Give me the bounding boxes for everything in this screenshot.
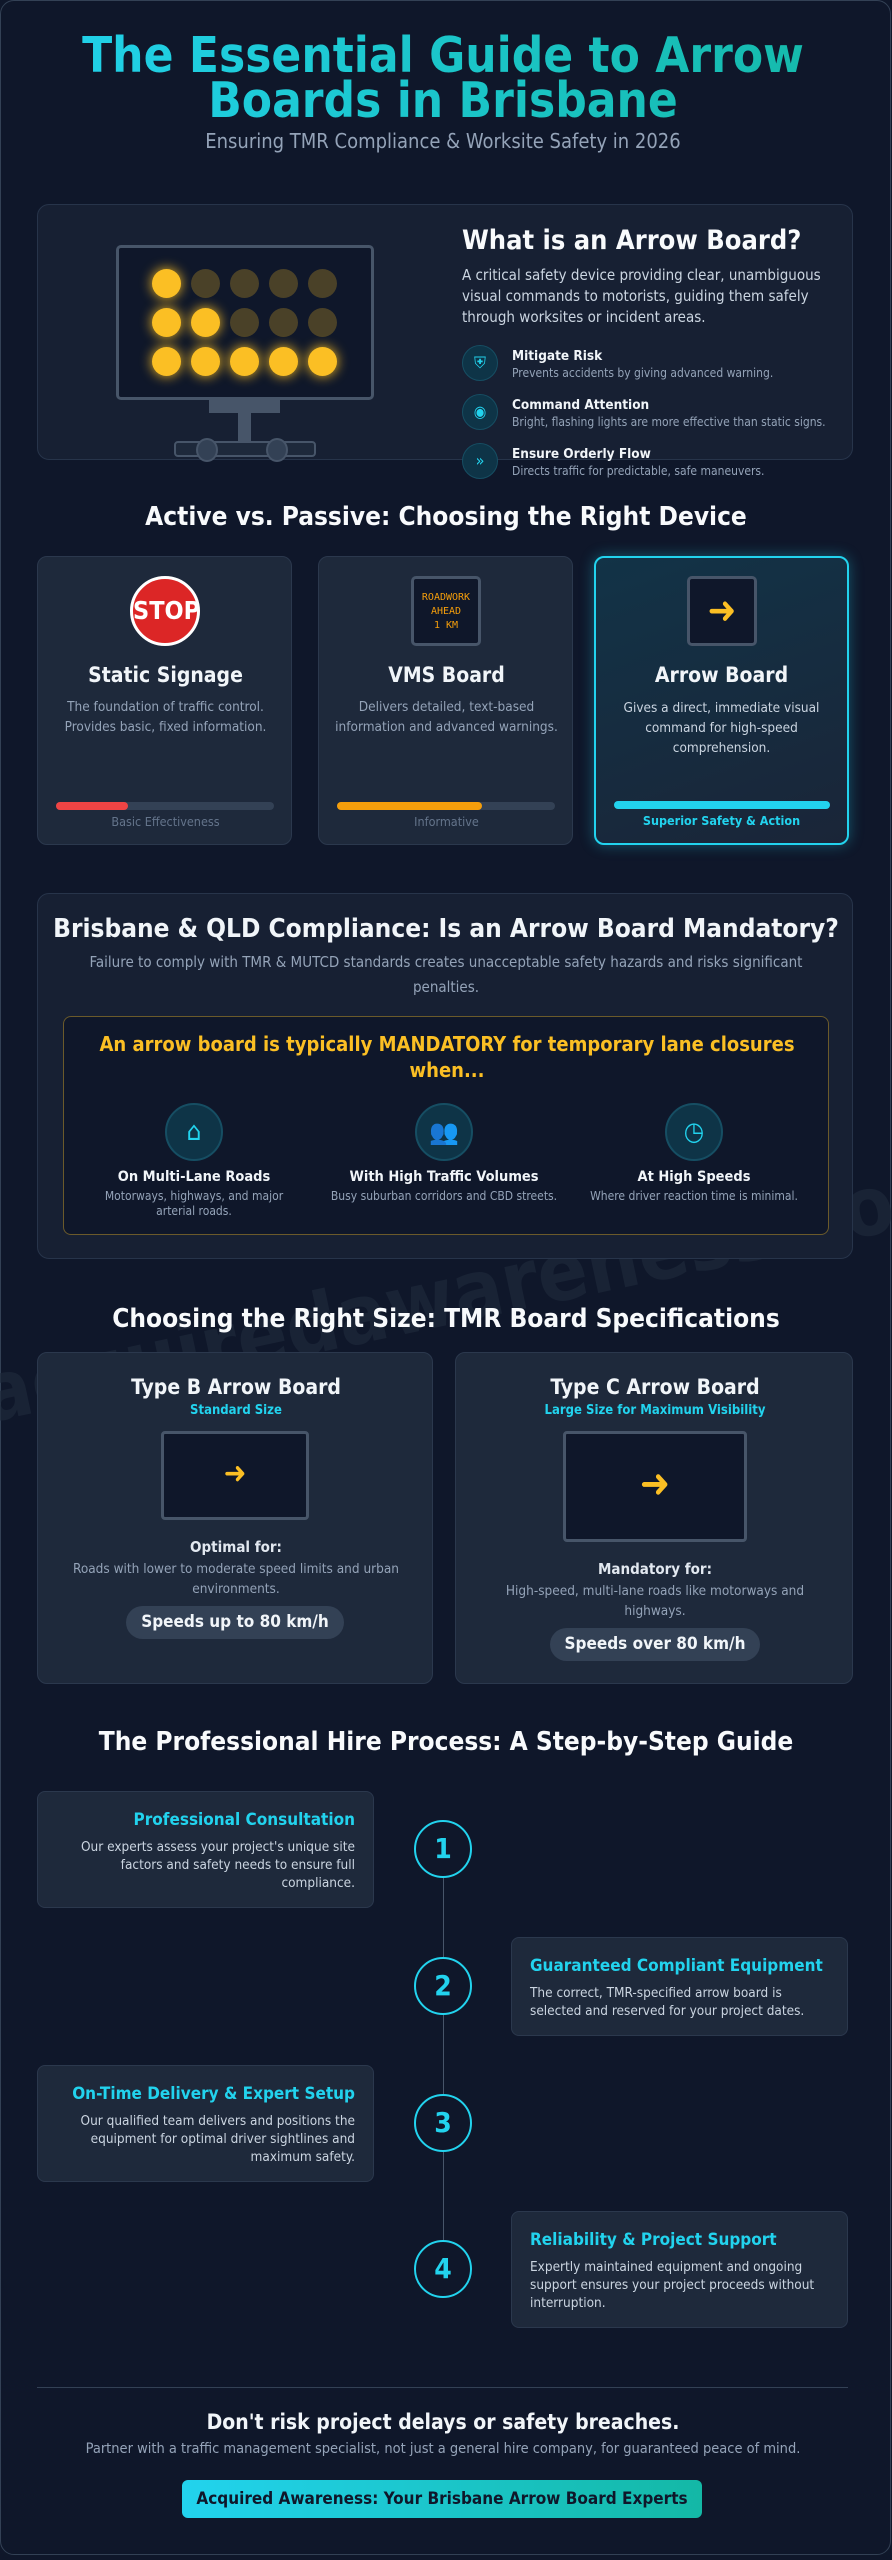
heading: What is an Arrow Board?	[462, 225, 801, 256]
step 1: Our experts assess your project's unique site factors and safety needs to ensure full compliance.	[81, 1839, 355, 1891]
feature: orderly flow: »	[476, 451, 484, 470]
feature: mitigate risk: Prevents accidents by giving advanced warning.	[512, 366, 773, 380]
step 1	[37, 1791, 374, 1908]
step 4: Reliability & Project Support	[530, 2230, 777, 2250]
card: vms board: Informative	[414, 814, 479, 829]
callout: mandatory conditions	[63, 1016, 829, 1235]
card: vms board	[318, 556, 573, 845]
icon: vms	[411, 576, 481, 646]
circle 2	[414, 1957, 472, 2015]
step 1: Professional Consultation	[134, 1810, 355, 1830]
bar	[56, 802, 274, 810]
condition: multi-lane	[105, 1103, 284, 1218]
condition: traffic volume: 👥	[429, 1118, 459, 1146]
card: arrow board (highlighted): Superior Safety & Action	[643, 813, 800, 828]
title: The Essential Guide to Arrow	[82, 27, 804, 84]
panel: compliance: Brisbane & QLD Compliance: Is an Arrow Board Mandatory?	[53, 914, 839, 944]
cta button	[182, 2480, 702, 2518]
condition: multi-lane: On Multi-Lane Roads	[118, 1169, 270, 1185]
title: Boards in Brisbane	[208, 72, 678, 129]
feature: mitigate risk	[462, 345, 773, 381]
circle 4: 4	[434, 2252, 452, 2285]
card: arrow board (highlighted): Arrow Board	[655, 663, 788, 687]
footer heading: Don't risk project delays or safety breaches.	[207, 2410, 679, 2434]
card: type C: Speeds over 80 km/h	[564, 1634, 746, 1654]
step 2: The correct, TMR-specified arrow board is selected and reserved for your project dates.	[530, 1985, 804, 2019]
circle 2: 2	[434, 1969, 452, 2002]
condition: high speed: Where driver reaction time is minimal.	[590, 1189, 798, 1203]
circle 3	[414, 2094, 472, 2152]
feature: orderly flow	[462, 443, 764, 479]
condition: traffic volume	[331, 1103, 557, 1203]
panel: compliance: Failure to comply with TMR & MUTCD standards creates unacceptable safety hazards and risks significant penalties.	[90, 953, 802, 996]
step 3	[37, 2065, 374, 2182]
card: static signage: Static Signage	[88, 663, 243, 687]
card: type B: Speeds up to 80 km/h	[141, 1612, 329, 1632]
feature: orderly flow: Directs traffic for predictable, safe maneuvers.	[512, 464, 764, 478]
card: vms board: VMS Board	[388, 663, 505, 687]
condition: high speed: ◷	[684, 1117, 704, 1147]
panel: what is an arrow board	[37, 204, 853, 460]
card: type C: High-speed, multi-lane roads like motorways and highways.	[506, 1583, 804, 1619]
step 2: Guaranteed Compliant Equipment	[530, 1956, 823, 1976]
footer text: Partner with a traffic management specialist, not just a general hire company, for guaranteed peace of mind.	[86, 2441, 800, 2457]
illustration: arrow board	[116, 245, 374, 462]
icon: small board	[161, 1431, 309, 1520]
circle 1: 1	[434, 1832, 452, 1865]
step 2	[511, 1937, 848, 2036]
condition: traffic volume: Busy suburban corridors and CBD streets.	[331, 1189, 557, 1203]
heading: sizes: Choosing the Right Size: TMR Board Specifications	[112, 1304, 780, 1334]
cta button: Acquired Awareness: Your Brisbane Arrow Board Experts	[196, 2489, 688, 2509]
condition: high speed	[590, 1103, 798, 1203]
icon: arrow	[687, 576, 757, 646]
card: static signage: The foundation of traffic control. Provides basic, fixed information.	[65, 699, 266, 735]
step 4	[511, 2211, 848, 2328]
icon: small board: ➜	[224, 1456, 246, 1491]
title	[0, 33, 886, 123]
timeline line	[443, 1850, 444, 2270]
card: type C: Large Size for Maximum Visibility	[545, 1403, 765, 1418]
card: type B	[37, 1352, 433, 1684]
card: type C	[455, 1352, 853, 1684]
condition: multi-lane: Motorways, highways, and major arterial roads.	[105, 1189, 283, 1218]
card: type C: Mandatory for:	[598, 1560, 712, 1578]
step 4: Expertly maintained equipment and ongoing support ensures your project proceeds without interruption.	[530, 2259, 814, 2311]
card: static signage	[37, 556, 292, 845]
feature: command attention: ◉	[474, 402, 486, 421]
icon: vms: ROADWORK	[422, 592, 470, 603]
feature: orderly flow: Ensure Orderly Flow	[512, 446, 651, 462]
feature: mitigate risk: ⛨	[474, 353, 486, 372]
circle 4	[414, 2240, 472, 2298]
feature: command attention: Command Attention	[512, 397, 649, 413]
feature: command attention	[462, 394, 826, 430]
step 3: Our qualified team delivers and positions the equipment for optimal driver sightlines and maximum safety.	[81, 2113, 355, 2165]
subtitle: Ensuring TMR Compliance & Worksite Safety in 2026	[205, 129, 681, 153]
feature: mitigate risk: Mitigate Risk	[512, 348, 602, 364]
panel: compliance	[37, 893, 853, 1259]
card: type B: Optimal for:	[190, 1538, 282, 1556]
card: arrow board (highlighted)	[594, 556, 849, 845]
icon: stop sign: STOP	[133, 596, 200, 625]
callout: mandatory conditions: An arrow board is typically MANDATORY for temporary lane closures when...	[99, 1032, 795, 1082]
card: type C: Type C Arrow Board	[550, 1375, 760, 1399]
condition: multi-lane: ⌂	[187, 1117, 201, 1147]
feature list	[462, 345, 826, 479]
card: vms board: Delivers detailed, text-based information and advanced warnings.	[335, 699, 558, 735]
card: type B: Standard Size	[190, 1403, 282, 1418]
heading: active vs passive: Active vs. Passive: Choosing the Right Device	[145, 502, 747, 532]
card: arrow board (highlighted): Gives a direct, immediate visual command for high-speed comprehension.	[624, 700, 819, 756]
card: static signage: Basic Effectiveness	[111, 814, 220, 829]
icon: arrow: ➜	[708, 588, 736, 632]
icon: stop sign	[130, 576, 200, 646]
icon: large board: ➜	[640, 1461, 670, 1507]
circle 3: 3	[434, 2106, 452, 2139]
icon: vms: 1 KM	[434, 620, 458, 631]
card: type B: Roads with lower to moderate speed limits and urban environments.	[73, 1561, 399, 1597]
icon: large board	[563, 1431, 747, 1542]
heading: hire process: The Professional Hire Process: A Step-by-Step Guide	[99, 1727, 793, 1757]
icon: vms: AHEAD	[431, 606, 461, 617]
card: type B: Type B Arrow Board	[131, 1375, 341, 1399]
step 3: On-Time Delivery & Expert Setup	[72, 2084, 355, 2104]
feature: command attention: Bright, flashing lights are more effective than static signs.	[512, 415, 826, 429]
description: A critical safety device providing clear, unambiguous visual commands to motorists, guiding them safely through worksites or incident areas.	[462, 266, 821, 326]
circle 1	[414, 1820, 472, 1878]
condition: traffic volume: With High Traffic Volumes	[349, 1169, 539, 1185]
condition: high speed: At High Speeds	[638, 1169, 750, 1185]
